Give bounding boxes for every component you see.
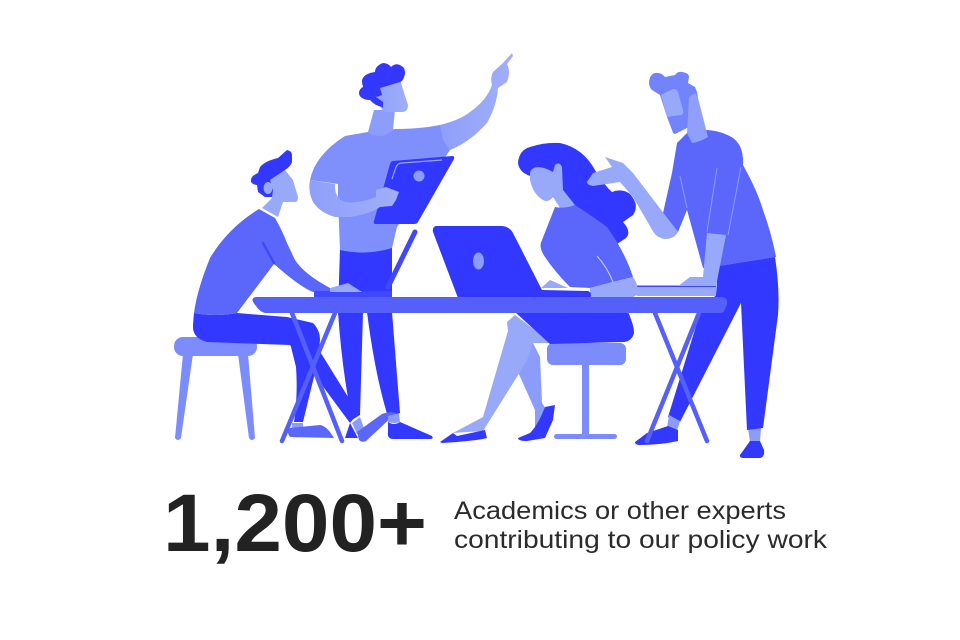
seated man far leg bbox=[290, 343, 318, 422]
seated man sleeve crease bbox=[263, 243, 274, 263]
bearded man reaching arm bbox=[587, 157, 678, 239]
standing man torso bbox=[310, 125, 450, 253]
bearded man front shoe bbox=[635, 415, 680, 445]
person: standing man with beard bbox=[587, 72, 779, 458]
left table legs bbox=[282, 313, 342, 441]
standing man neck bbox=[368, 110, 395, 136]
person: standing man with tablet bbox=[309, 53, 513, 442]
tablet bbox=[374, 156, 454, 224]
bearded man torso bbox=[663, 130, 776, 268]
background laptop and hand bbox=[314, 232, 415, 298]
standing man raised arm bbox=[440, 53, 513, 150]
seated man thighs bbox=[193, 313, 358, 423]
woman front leg bbox=[453, 315, 552, 433]
illustration: team around a table bbox=[174, 53, 779, 458]
woman back leg bbox=[518, 343, 548, 436]
standing man legs bbox=[338, 247, 400, 420]
standing man lower arm and hand bbox=[309, 180, 399, 217]
seated man ear bbox=[264, 182, 272, 194]
woman skirt bbox=[515, 312, 634, 344]
laptop logo bbox=[473, 252, 484, 270]
table top bbox=[252, 297, 727, 313]
stool: left bbox=[174, 337, 257, 440]
statistic: 1,200+: 1,200+ bbox=[163, 478, 427, 569]
bearded man sleeve creases bbox=[680, 167, 741, 235]
woman shoes bbox=[440, 405, 555, 443]
seated man head and neck bbox=[262, 170, 298, 217]
book on table bbox=[637, 286, 716, 296]
woman sleeve crease bbox=[597, 256, 613, 282]
seated man torso and arm bbox=[194, 209, 330, 315]
description text bbox=[454, 497, 828, 554]
bearded man neck bbox=[687, 93, 708, 143]
standing man shoes bbox=[345, 412, 433, 442]
seated man hair bbox=[251, 150, 292, 197]
description line 1: Academics or other experts bbox=[454, 497, 786, 525]
bearded man face bbox=[661, 89, 683, 117]
person: woman at laptop bbox=[440, 143, 638, 443]
stool: right bbox=[547, 343, 626, 439]
standing man hair bbox=[359, 63, 405, 107]
woman hair bbox=[518, 143, 636, 244]
bearded man hair and beard bbox=[649, 72, 698, 134]
description line 2: contributing to our policy work bbox=[454, 526, 828, 554]
person: seated man bbox=[193, 150, 358, 438]
central laptop bbox=[433, 226, 591, 298]
woman torso bbox=[541, 205, 633, 288]
woman face bbox=[530, 163, 575, 208]
standing man head bbox=[375, 80, 408, 112]
bearded man rear shoe bbox=[740, 428, 764, 458]
bearded man trousers bbox=[668, 257, 779, 430]
woman hand bbox=[541, 280, 568, 288]
woman arm bbox=[590, 277, 638, 297]
bearded man forearm and hand bbox=[678, 233, 726, 286]
seated man shoe bbox=[288, 423, 334, 438]
right table legs bbox=[647, 313, 707, 441]
